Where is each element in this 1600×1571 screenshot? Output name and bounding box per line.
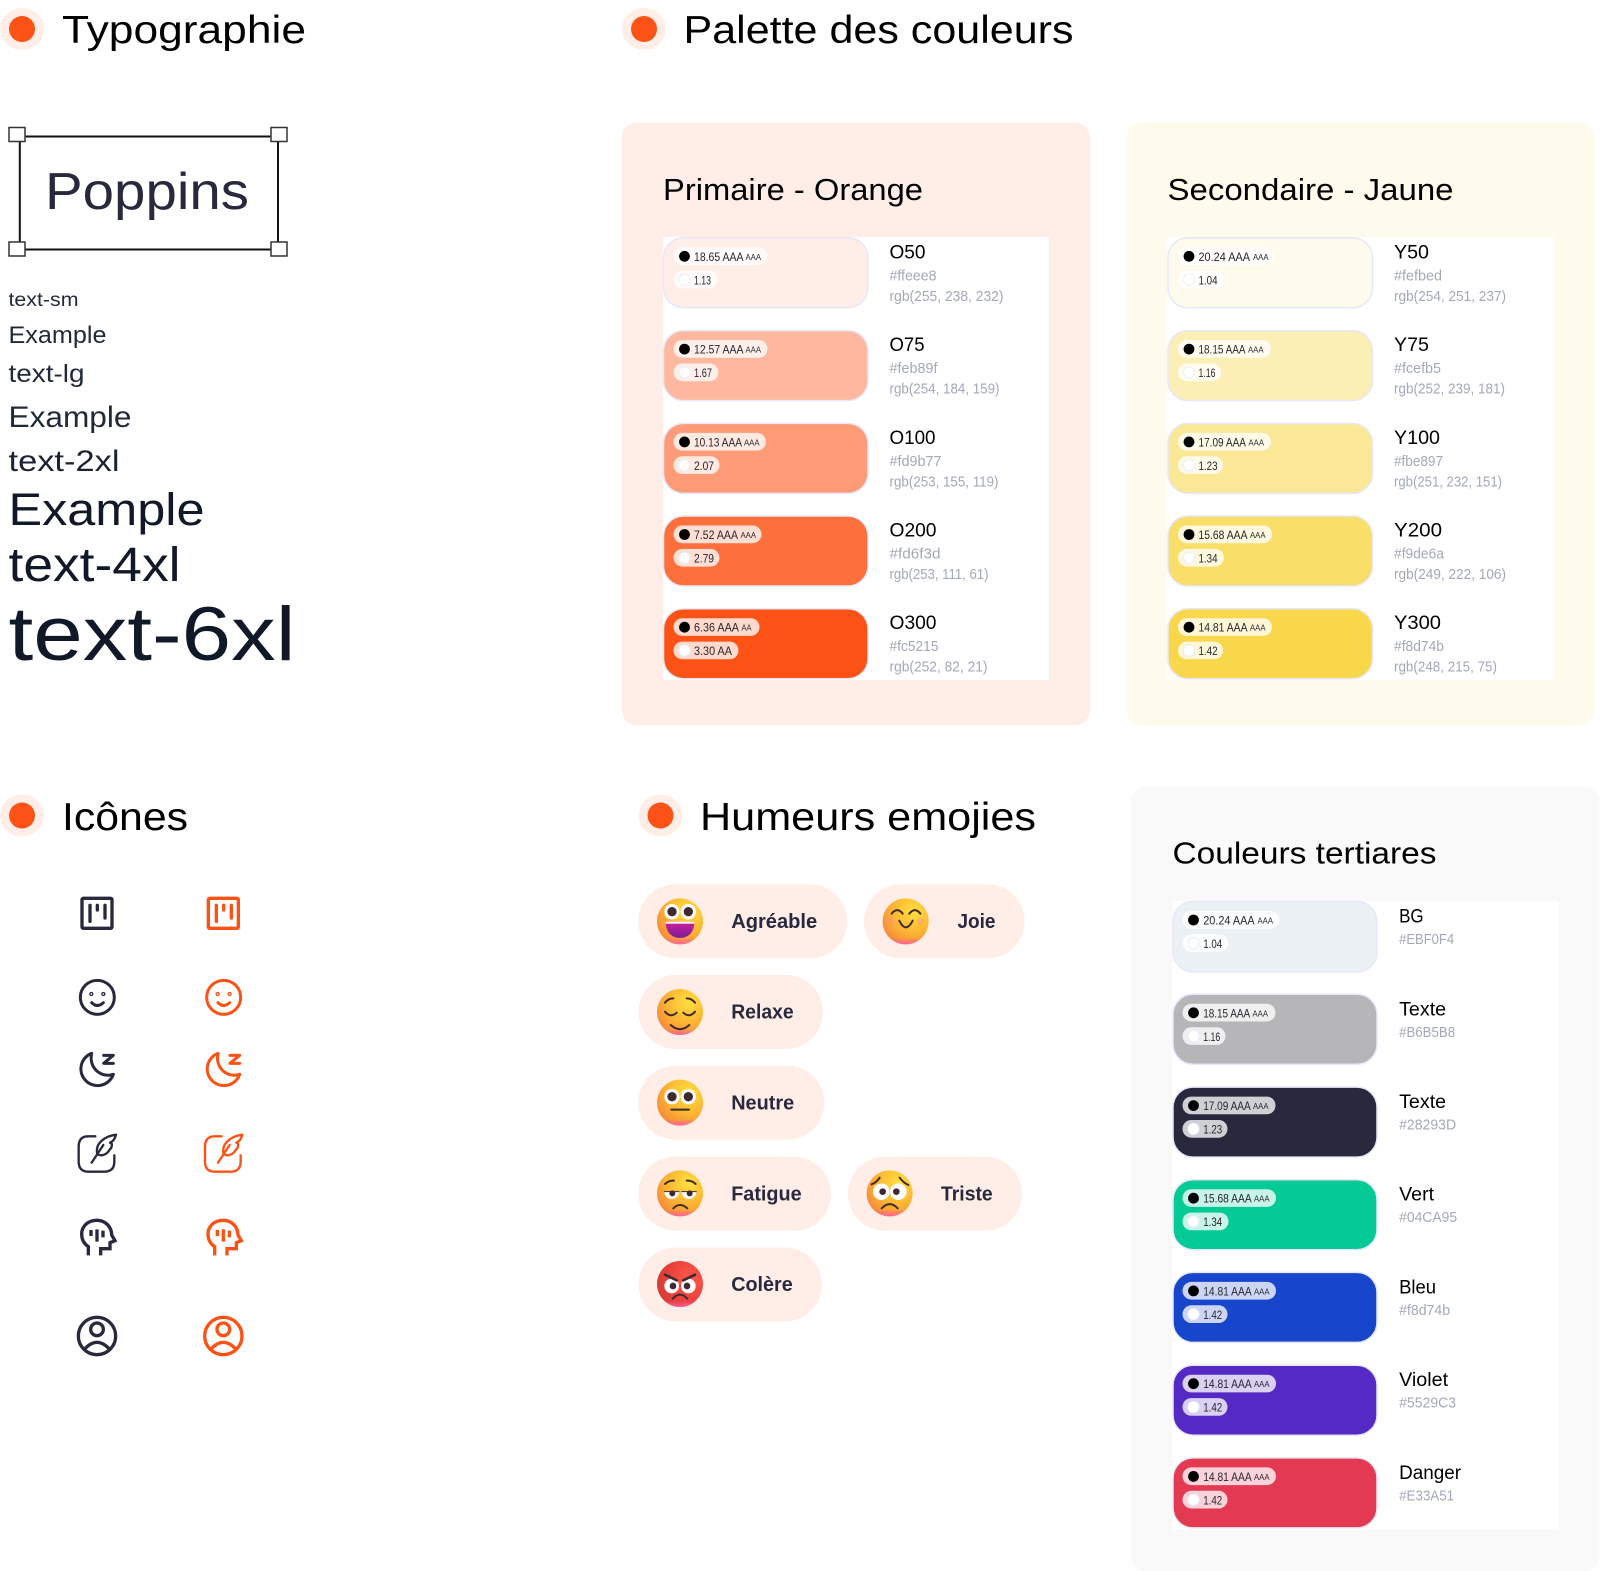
chip: Joie bbox=[864, 884, 1025, 958]
panel: couleurs tertiaires bbox=[1131, 787, 1600, 1571]
swatch: Y200: 1.34 bbox=[1198, 552, 1218, 566]
swatch: O100: AAA bbox=[744, 438, 760, 447]
swatch: Y100: AAA bbox=[1248, 438, 1265, 447]
chip: Colère: Colère bbox=[731, 1273, 793, 1296]
icon: head bbox=[82, 1220, 115, 1255]
swatch: Violet: Violet bbox=[1399, 1370, 1449, 1391]
swatch: BG: 20.24 AAA bbox=[1203, 914, 1255, 928]
swatch: O300: 6.36 AAA bbox=[694, 621, 739, 635]
swatch: Danger: #E33A51 bbox=[1399, 1488, 1454, 1504]
swatch: Bleu: #f8d74b bbox=[1399, 1303, 1450, 1319]
swatch: Violet: 1.42 bbox=[1203, 1401, 1222, 1415]
swatch: O300: 3.30 AA bbox=[694, 644, 732, 658]
swatch: BG: BG bbox=[1399, 906, 1424, 928]
chip: Agréable bbox=[638, 884, 847, 958]
type scale samples: Example bbox=[8, 484, 205, 535]
heading: Palette des couleurs: Palette des couleurs bbox=[684, 9, 1074, 52]
swatch: O300 bbox=[664, 609, 988, 679]
swatch: Danger: 14.81 AAA bbox=[1203, 1470, 1252, 1484]
swatch: BG: 1.04 bbox=[1203, 937, 1222, 951]
icon: board bbox=[208, 898, 238, 928]
swatch: O200: rgb(253, 111, 61) bbox=[890, 567, 988, 583]
swatch: Violet bbox=[1173, 1365, 1456, 1435]
swatch: Violet: 14.81 AAA bbox=[1203, 1377, 1252, 1391]
type scale samples: text-6xl bbox=[8, 592, 296, 677]
type scale samples: text-2xl bbox=[8, 445, 120, 478]
swatch: Y75: 1.16 bbox=[1198, 366, 1216, 380]
swatch: O50: 1.13 bbox=[694, 273, 711, 287]
swatch: O200: O200 bbox=[890, 520, 936, 542]
chip: Fatigue: Fatigue bbox=[731, 1182, 802, 1205]
heading: Icônes bbox=[0, 794, 188, 839]
chip: Colère bbox=[638, 1248, 822, 1322]
icon: feather note bbox=[205, 1135, 242, 1172]
swatch: Bleu: 14.81 AAA bbox=[1203, 1284, 1252, 1298]
swatch: O75: 12.57 AAA bbox=[694, 343, 744, 357]
swatch: Texte gris bbox=[1173, 994, 1455, 1064]
icon set: dark bbox=[78, 898, 116, 1355]
swatch: O50: #ffeee8 bbox=[890, 268, 936, 284]
swatch: Y300: 14.81 AAA bbox=[1198, 621, 1248, 635]
swatch: O200: AAA bbox=[740, 531, 757, 540]
swatch: O100: O100 bbox=[890, 428, 936, 449]
icon: feather note bbox=[79, 1135, 116, 1172]
mood chips bbox=[638, 884, 1025, 1322]
swatch: Violet: #5529C3 bbox=[1399, 1396, 1456, 1412]
swatch: Y75: Y75 bbox=[1394, 335, 1429, 356]
icon: smile bbox=[207, 980, 241, 1014]
panel: secondaire jaune bbox=[1126, 123, 1594, 725]
swatch: Y300: AAA bbox=[1250, 624, 1266, 633]
swatch: Texte sombre: 17.09 AAA bbox=[1203, 1099, 1251, 1113]
swatch: Y300: Y300 bbox=[1394, 613, 1441, 634]
type scale samples bbox=[8, 290, 296, 677]
icon set: orange bbox=[205, 898, 242, 1355]
swatch: Y50: Y50 bbox=[1394, 242, 1429, 263]
swatch: Texte sombre: #28293D bbox=[1399, 1118, 1456, 1134]
panel: primaire orange: Primaire - Orange bbox=[663, 172, 923, 207]
swatch: Y100: 17.09 AAA bbox=[1198, 435, 1246, 449]
swatch: Y50: 20.24 AAA bbox=[1198, 250, 1250, 264]
swatch: Y300: 1.42 bbox=[1198, 644, 1218, 658]
swatch: Vert: Vert bbox=[1399, 1185, 1435, 1206]
panel: secondaire jaune: Secondaire - Jaune bbox=[1168, 172, 1454, 207]
swatch: Danger: 1.42 bbox=[1203, 1493, 1222, 1507]
swatch: Texte sombre: AAA bbox=[1253, 1102, 1269, 1111]
swatch: O200: 2.79 bbox=[694, 552, 714, 566]
swatch: Y50 bbox=[1168, 238, 1506, 308]
swatch: Y75: 18.15 AAA bbox=[1198, 343, 1246, 357]
swatch: O300: #fc5215 bbox=[890, 639, 938, 655]
panel: primaire orange bbox=[622, 123, 1090, 725]
chip: Agréable: Agréable bbox=[731, 910, 817, 933]
swatch: O200 bbox=[664, 516, 988, 586]
swatch: O100: rgb(253, 155, 119) bbox=[890, 474, 998, 490]
heading: Typographie: Typographie bbox=[62, 9, 306, 52]
swatch: Y100: rgb(251, 232, 151) bbox=[1394, 474, 1502, 490]
swatch: Y75: rgb(252, 239, 181) bbox=[1394, 382, 1505, 398]
chip: Relaxe: Relaxe bbox=[731, 1001, 794, 1024]
swatch: Vert: #04CA95 bbox=[1399, 1210, 1457, 1226]
swatch: Texte sombre: 1.23 bbox=[1203, 1123, 1222, 1137]
swatch: Danger bbox=[1173, 1458, 1462, 1528]
swatch: O50: O50 bbox=[890, 242, 926, 263]
panel: couleurs tertiaires: Couleurs tertiares bbox=[1172, 835, 1436, 870]
swatch: O75 bbox=[664, 331, 1000, 401]
chip: Joie: Joie bbox=[958, 910, 996, 933]
swatch: Y200: Y200 bbox=[1394, 520, 1442, 542]
swatch: Y50: rgb(254, 251, 237) bbox=[1394, 289, 1506, 305]
swatch: Texte gris: 18.15 AAA bbox=[1203, 1006, 1250, 1020]
swatch: Vert: 1.34 bbox=[1203, 1215, 1222, 1229]
swatch: Y200: rgb(249, 222, 106) bbox=[1394, 567, 1506, 583]
swatch: Texte sombre: Texte bbox=[1399, 1092, 1446, 1113]
swatch: Y300: #f8d74b bbox=[1394, 639, 1444, 655]
icon: smile bbox=[80, 980, 114, 1014]
swatch: O50: rgb(255, 238, 232) bbox=[890, 289, 1004, 305]
swatch: O100: 10.13 AAA bbox=[694, 435, 742, 449]
swatch: Y50: 1.04 bbox=[1198, 273, 1218, 287]
swatch: Bleu bbox=[1173, 1272, 1450, 1342]
swatch: O75: O75 bbox=[890, 335, 924, 356]
swatch: Danger: Danger bbox=[1399, 1463, 1462, 1484]
swatch: O100: #fd9b77 bbox=[890, 454, 942, 470]
swatch: O75: rgb(254, 184, 159) bbox=[890, 382, 1000, 398]
swatch: O300: O300 bbox=[890, 613, 936, 634]
swatch: Texte sombre bbox=[1173, 1087, 1456, 1157]
heading: Icônes: Icônes bbox=[62, 796, 188, 839]
icon: user bbox=[78, 1317, 116, 1355]
swatch: Texte gris: #B6B5B8 bbox=[1399, 1025, 1455, 1041]
swatch: Y200: AAA bbox=[1250, 531, 1266, 540]
icon: moon sleep bbox=[207, 1053, 240, 1086]
swatch: Bleu: Bleu bbox=[1399, 1277, 1436, 1298]
icon: moon sleep bbox=[81, 1053, 113, 1086]
swatch: Bleu: 1.42 bbox=[1203, 1308, 1222, 1322]
swatch: Texte gris: AAA bbox=[1252, 1009, 1269, 1018]
swatch: O50: AAA bbox=[746, 253, 762, 262]
swatch: Vert: AAA bbox=[1254, 1195, 1270, 1204]
swatch: Y200: #f9de6a bbox=[1394, 546, 1445, 562]
swatch: BG bbox=[1173, 902, 1454, 972]
swatch: Vert: 15.68 AAA bbox=[1203, 1192, 1252, 1206]
swatch: Y200 bbox=[1168, 516, 1506, 586]
swatch: Danger: AAA bbox=[1254, 1473, 1270, 1482]
chip: Triste bbox=[848, 1157, 1022, 1231]
swatch: O50: 18.65 AAA bbox=[694, 250, 744, 264]
swatch: Y75 bbox=[1168, 331, 1505, 401]
chip: Relaxe bbox=[638, 975, 823, 1049]
swatch: O75: #feb89f bbox=[890, 361, 938, 377]
chip: Neutre: Neutre bbox=[731, 1091, 794, 1114]
icon: board bbox=[82, 898, 112, 928]
swatch: O75: AAA bbox=[746, 346, 762, 355]
swatch: Y100: #fbe897 bbox=[1394, 454, 1443, 470]
swatch: O200: #fd6f3d bbox=[890, 546, 940, 562]
swatch: O100: 2.07 bbox=[694, 459, 714, 473]
swatch: O300: rgb(252, 82, 21) bbox=[890, 660, 988, 676]
swatch: Y100: 1.23 bbox=[1198, 459, 1218, 473]
chip: Triste: Triste bbox=[941, 1182, 993, 1205]
type scale samples: Example bbox=[8, 401, 132, 434]
swatch: Y50: #fefbed bbox=[1394, 268, 1442, 284]
swatch: Vert bbox=[1173, 1180, 1457, 1250]
swatch: O200: 7.52 AAA bbox=[694, 528, 738, 542]
heading: Humeurs emojies: Humeurs emojies bbox=[700, 796, 1036, 839]
type scale samples: text-sm bbox=[8, 290, 78, 311]
chip: Neutre bbox=[638, 1066, 824, 1140]
swatch: Y100: Y100 bbox=[1394, 428, 1440, 449]
swatch: Y75: #fcefb5 bbox=[1394, 361, 1441, 377]
swatch: Texte gris: Texte bbox=[1399, 999, 1446, 1020]
chip: Fatigue bbox=[638, 1157, 831, 1231]
swatch: Y75: AAA bbox=[1248, 346, 1264, 355]
swatch: Violet: AAA bbox=[1254, 1380, 1270, 1389]
swatch: O75: 1.67 bbox=[694, 366, 712, 380]
swatch: Bleu: AAA bbox=[1254, 1287, 1270, 1296]
swatch: O100 bbox=[664, 423, 998, 493]
type scale samples: Example bbox=[8, 322, 106, 349]
type scale samples: text-4xl bbox=[8, 539, 180, 592]
font specimen: Poppins selection box: Poppins bbox=[45, 163, 249, 221]
icon: user bbox=[205, 1317, 242, 1355]
swatch: Y50: AAA bbox=[1253, 253, 1269, 262]
swatch: O300: AA bbox=[742, 624, 752, 633]
swatch: Texte gris: 1.16 bbox=[1203, 1030, 1220, 1044]
swatch: Y100 bbox=[1168, 423, 1502, 493]
font specimen: Poppins selection box bbox=[9, 128, 287, 256]
type scale samples: text-lg bbox=[8, 360, 84, 388]
swatch: Y300 bbox=[1168, 609, 1497, 679]
heading: Typographie bbox=[0, 8, 306, 52]
swatch: Y300: rgb(248, 215, 75) bbox=[1394, 660, 1497, 676]
icon: head bbox=[208, 1220, 241, 1255]
swatch: Y200: 15.68 AAA bbox=[1198, 528, 1248, 542]
swatch: O50 bbox=[664, 238, 1004, 308]
swatch: BG: AAA bbox=[1258, 916, 1274, 926]
swatch: BG: #EBF0F4 bbox=[1399, 932, 1454, 948]
